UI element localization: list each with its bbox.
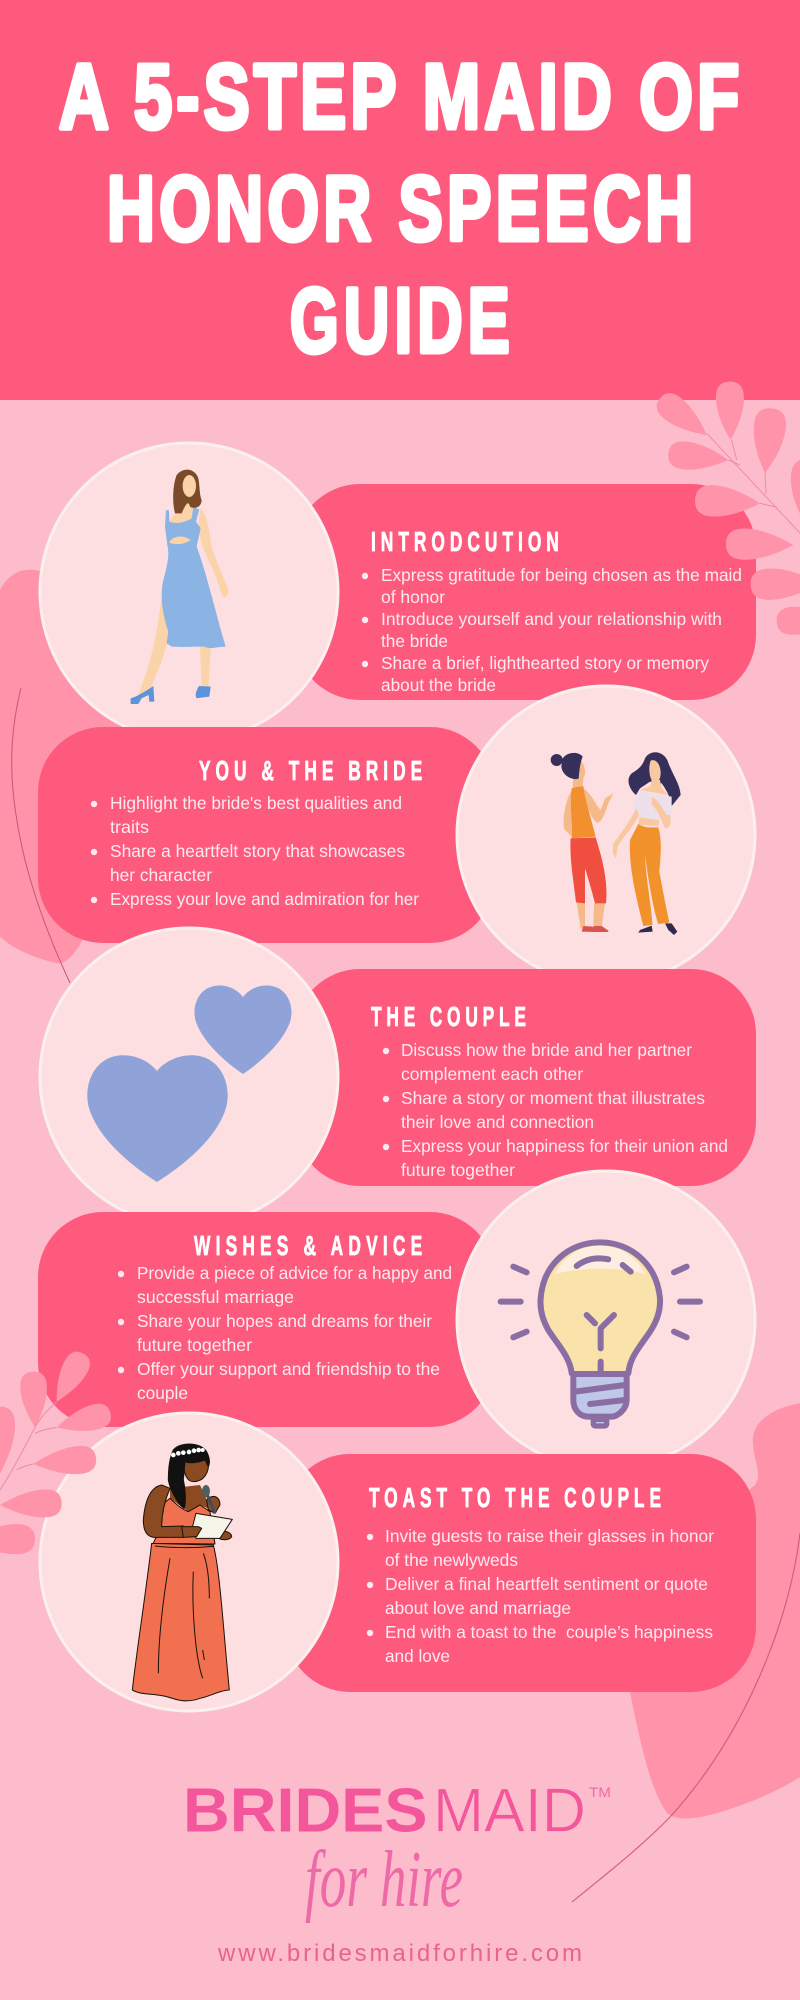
icon: two women talking bbox=[551, 752, 681, 935]
panel: toast to the couple bbox=[285, 1454, 756, 1692]
bullet list: toast to the couple: Deliver a final heartfelt sentiment or quote bbox=[385, 1574, 708, 1594]
thin curve left bbox=[12, 688, 70, 983]
circle: bride giving a speech bbox=[40, 1413, 338, 1711]
title: GUIDE bbox=[290, 269, 510, 372]
bullet list: toast to the couple: End with a toast to the couple’s happiness bbox=[385, 1622, 713, 1642]
bullet list: toast to the couple bbox=[367, 1526, 714, 1666]
bullet list: toast to the couple: about love and marriage bbox=[385, 1598, 571, 1618]
heading: wishes and advice: WISHES & ADVICE bbox=[194, 1230, 422, 1261]
bullet list: you and the bride: Highlight the bride's best qualities and bbox=[110, 793, 402, 813]
icon: woman with microphone bbox=[132, 1444, 232, 1701]
bullet list: you and the bride: traits bbox=[110, 817, 149, 837]
bullet list: introduction: about the bride bbox=[381, 675, 496, 695]
bullet list: introduction: Share a brief, lighthearted story or memory bbox=[381, 653, 709, 673]
icon: woman in blue dress bbox=[131, 470, 228, 704]
heading: toast to the couple: TOAST TO THE COUPLE bbox=[369, 1482, 661, 1513]
bullet list: wishes and advice: Provide a piece of advice for a happy and bbox=[137, 1263, 452, 1283]
logo script: for hire: hire bbox=[380, 1836, 463, 1924]
decorative blob left bbox=[0, 570, 140, 963]
header banner bbox=[0, 0, 800, 400]
bullet list: the couple bbox=[383, 1040, 728, 1180]
bullet list: introduction: Express gratitude for being chosen as the maid bbox=[381, 565, 742, 585]
panel: wishes and advice bbox=[38, 1212, 495, 1427]
bullet list: toast to the couple: Invite guests to raise their glasses in honor bbox=[385, 1526, 714, 1546]
bullet list: toast to the couple: of the newlyweds bbox=[385, 1550, 518, 1570]
bullet list: wishes and advice: Offer your support and friendship to the bbox=[137, 1359, 440, 1379]
logo script: for hire bbox=[305, 1836, 463, 1924]
panel: introduction bbox=[295, 484, 756, 700]
circle: two women talking bbox=[457, 686, 755, 984]
logo bbox=[183, 1776, 611, 1924]
panel: you and the bride bbox=[38, 727, 495, 943]
logo word: bridesmaid: MAID bbox=[433, 1776, 586, 1846]
decorative blob right bbox=[620, 1403, 800, 1819]
logo word: bridesmaid: TM bbox=[589, 1785, 611, 1800]
circle: light bulb bbox=[457, 1171, 755, 1469]
bullet list: you and the bride: Share a heartfelt story that showcases bbox=[110, 841, 405, 861]
logo word: bridesmaid bbox=[183, 1776, 611, 1846]
circle: hearts bbox=[40, 928, 338, 1226]
bullet list: wishes and advice: future together bbox=[137, 1335, 252, 1355]
logo word: bridesmaid: BRIDES bbox=[183, 1776, 428, 1846]
heading: the couple: THE COUPLE bbox=[371, 1001, 526, 1032]
thin curve right bbox=[572, 1533, 800, 1902]
icon: light bulb bbox=[501, 1242, 700, 1426]
title bbox=[59, 45, 739, 372]
bullet list: introduction: of honor bbox=[381, 587, 445, 607]
bullet list: wishes and advice: Share your hopes and dreams for their bbox=[137, 1311, 432, 1331]
website url: www.bridesmaidforhire.com bbox=[217, 1940, 582, 1967]
bullet list: the couple: complement each other bbox=[401, 1064, 583, 1084]
bullet list: the couple: Express your happiness for their union and bbox=[401, 1136, 728, 1156]
title: HONOR SPEECH bbox=[107, 156, 693, 260]
heading: introduction: INTRODCUTION bbox=[371, 526, 559, 557]
bullet list: you and the bride: her character bbox=[110, 865, 212, 885]
bullet list: introduction: the bride bbox=[381, 631, 448, 651]
bullet list: the couple: Discuss how the bride and her partner bbox=[401, 1040, 692, 1060]
panel: the couple bbox=[295, 969, 756, 1186]
logo script: for hire: for bbox=[305, 1836, 368, 1924]
decorative leaves bottom left bbox=[0, 1347, 114, 1555]
bullet list: wishes and advice bbox=[118, 1263, 452, 1403]
bullet list: toast to the couple: and love bbox=[385, 1646, 450, 1666]
bullet list: the couple: future together bbox=[401, 1160, 515, 1180]
icon: two hearts bbox=[87, 985, 292, 1182]
bullet list: you and the bride: Express your love and admiration for her bbox=[110, 889, 419, 909]
heading: you and the bride: YOU & THE BRIDE bbox=[199, 755, 422, 786]
bullet list: wishes and advice: successful marriage bbox=[137, 1287, 294, 1307]
bullet list: the couple: their love and connection bbox=[401, 1112, 594, 1132]
bullet list: you and the bride bbox=[91, 793, 419, 909]
bullet list: introduction bbox=[362, 565, 742, 695]
title: A 5-STEP MAID OF bbox=[59, 45, 739, 148]
bullet list: introduction: Introduce yourself and your relationship with bbox=[381, 609, 722, 629]
bullet list: the couple: Share a story or moment that illustrates bbox=[401, 1088, 705, 1108]
bullet list: wishes and advice: couple bbox=[137, 1383, 188, 1403]
decorative leaves top right bbox=[652, 381, 800, 635]
circle: woman in blue dress bbox=[40, 443, 338, 741]
